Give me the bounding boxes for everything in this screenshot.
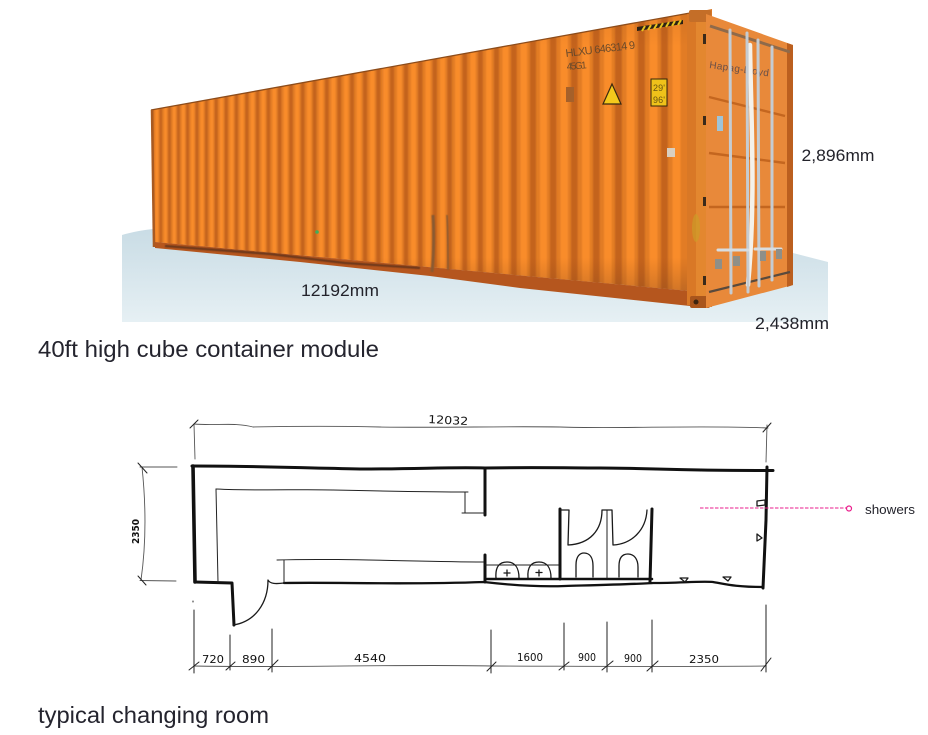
bottom rail xyxy=(155,242,690,306)
room width dimension xyxy=(131,463,177,585)
door face xyxy=(706,14,793,308)
small grey sticker xyxy=(667,148,675,157)
dimension label: length: 12192mm xyxy=(301,281,379,300)
bottom dimension chain: 900 xyxy=(578,651,596,664)
room width dimension: 2350 xyxy=(131,519,142,544)
door locking rods xyxy=(718,30,781,293)
shower cubicles xyxy=(487,509,652,582)
warning triangle xyxy=(603,84,621,104)
door lock plates xyxy=(715,249,782,269)
container number marking: HLXU 646314 9 xyxy=(565,40,636,60)
bottom dimension chain: 1600 xyxy=(517,651,543,664)
callout label: showers: showers xyxy=(865,502,916,517)
overall length dimension: 12032 xyxy=(428,413,468,428)
floor plan sketch xyxy=(131,413,773,673)
container side wall with corrugation xyxy=(150,12,689,291)
bottom dimension chain: 4540 xyxy=(354,652,386,665)
caption: changing room: typical changing room xyxy=(38,702,269,728)
height warning label xyxy=(651,79,667,106)
bottom dimension chain: 900 xyxy=(624,652,642,665)
height warning label: 29' xyxy=(653,83,665,93)
bottom dimension chain: 890 xyxy=(242,653,265,666)
container number marking: 45G1 xyxy=(566,60,588,73)
bottom dimension chain: 2350 xyxy=(689,653,719,666)
bottom dimension chain: 720 xyxy=(202,653,224,666)
bottom dimension chain xyxy=(189,601,771,673)
hooks xyxy=(680,500,765,582)
caption: container: 40ft high cube container module xyxy=(38,336,379,362)
container number marking xyxy=(565,40,636,102)
basins xyxy=(496,562,551,578)
panel: container photo xyxy=(122,0,828,330)
green mark xyxy=(315,230,319,234)
outer walls xyxy=(192,466,773,625)
bench lines xyxy=(216,489,560,583)
rust marks on rail and side xyxy=(165,215,448,272)
ground plane xyxy=(122,229,828,322)
overall length dimension xyxy=(190,413,771,462)
dimension label: height: 2,896mm xyxy=(802,146,874,165)
dimension label: width: 2,438mm xyxy=(755,314,829,333)
hazard stripes xyxy=(637,20,683,31)
door brand text: Hapag-Lloyd xyxy=(709,60,770,79)
callout: showers leader xyxy=(700,506,852,511)
corner post xyxy=(687,9,712,308)
door info sticker xyxy=(717,116,723,131)
door swing xyxy=(233,580,284,625)
height warning label: 96' xyxy=(653,95,665,105)
